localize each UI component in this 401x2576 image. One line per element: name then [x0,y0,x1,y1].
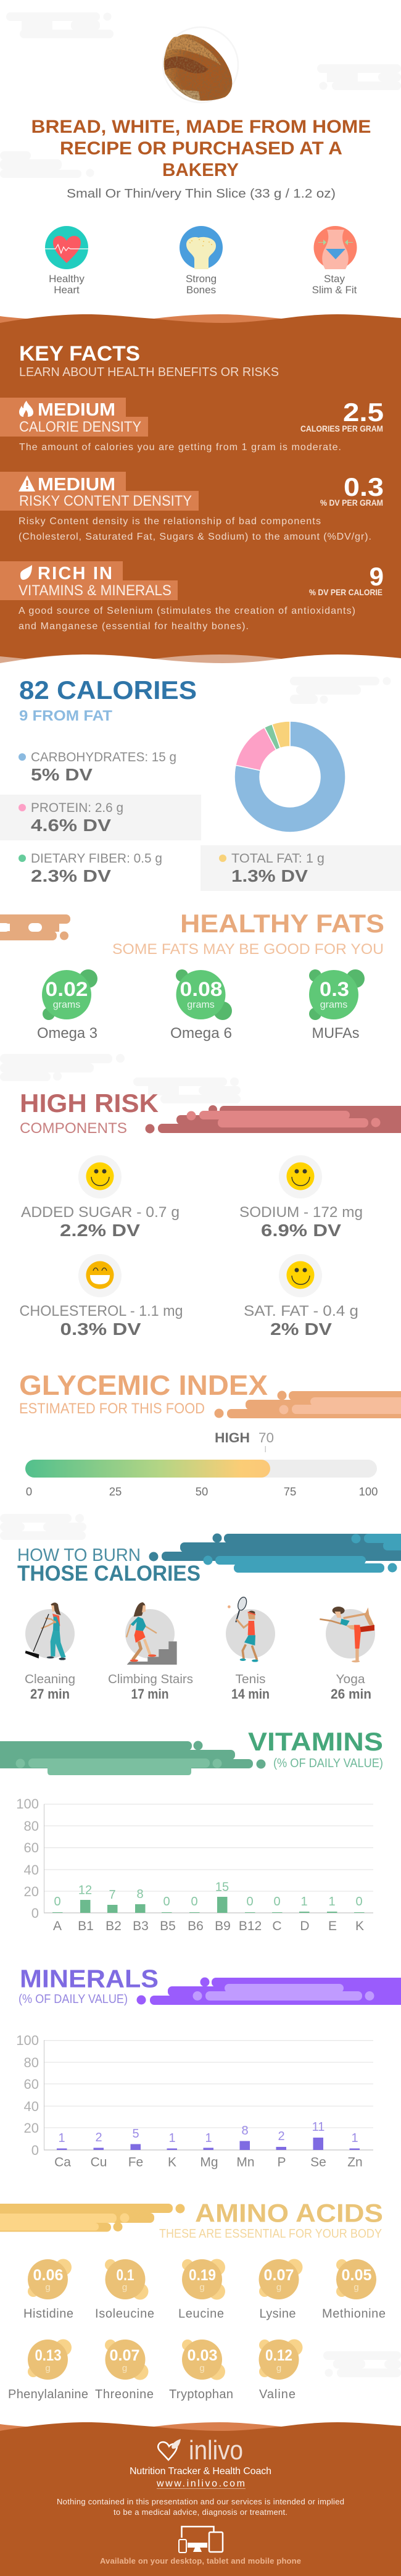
amino acid: methionine: Methionine [322,2307,386,2320]
nutrient: protein: PROTEIN: 2.6 g [31,801,123,815]
amino acid: phenylalanine [8,2339,88,2401]
chart: minerals bar chart: K [168,2155,176,2170]
heading: high risk: HIGH RISK [20,1089,159,1118]
stat: percent DV per calorie: 9 [370,562,384,591]
fat: omega 3: 0.02 [46,978,88,1000]
text: availability: Available on your desktop, tablet and mobile phone [100,2556,301,2566]
activity: yoga [320,1607,375,1702]
logo: inlivo [158,2435,243,2465]
badge: risky content density: RISKY CONTENT DENSITY [19,493,192,509]
text: calorie density description: The amount of calories you are getting from 1 gram is moderate. [19,442,341,453]
activity: cleaning [25,1602,75,1702]
label: yoga: 26 min [331,1686,371,1702]
activity: tennis [226,1596,275,1702]
fat: omega 6: grams [187,1000,215,1010]
subheading: vitamins percent of daily value: (% OF DAILY VALUE) [273,1757,383,1770]
chart: minerals bar chart: 1 [168,2131,176,2145]
heading: key facts: KEY FACTS [19,342,140,366]
chart: vitamins bar chart: 0 [31,1905,39,1921]
fat: omega 3 [37,969,97,1042]
heading: glycemic index: GLYCEMIC INDEX [19,1370,268,1401]
heading: healthy fats: HEALTHY FATS [180,909,384,938]
label: slim and fit: Stay [324,273,345,285]
badge: rich in vitamins and minerals [0,561,178,600]
chart: minerals bar chart: Mn [236,2155,255,2170]
chart: minerals bar chart: P [277,2155,286,2170]
amino acid: valine: g [276,2363,281,2373]
heading: calories: 82 CALORIES [19,675,197,705]
text: tagline: Nutrition Tracker & Health Coach [130,2466,271,2477]
amino acid: tryptophan: 0.03 [188,2347,217,2364]
amino acid: isoleucine: Isoleucine [95,2307,154,2320]
risk: sodium [239,1155,363,1240]
risk: saturated fat: SAT. FAT - 0.4 g [244,1303,358,1319]
fat: MUFAs [309,969,365,1042]
nutrient: total fat: 1.3% DV [231,866,308,885]
text: rich in description: and Manganese (essential for healthy bones). [19,621,249,632]
chart: vitamins bar chart: 100 [16,1796,39,1812]
chart: vitamins bar chart: 0 [246,1895,254,1909]
chart: minerals bar chart: 2 [278,2130,285,2143]
subheading: minerals percent of daily value: (% OF DAILY VALUE) [19,1993,128,2006]
chart: minerals bar chart: 1 [58,2131,65,2145]
amino acid: isoleucine: 0.1 [116,2267,134,2284]
decoration: high risk bars [146,1105,401,1134]
panel: key facts [0,314,401,663]
chart: vitamins bar chart: B5 [160,1919,176,1933]
heading: vitamins: VITAMINS [248,1727,383,1756]
amino acid: leucine: g [199,2282,205,2293]
amino acid: methionine: g [353,2282,359,2293]
label: yoga: Yoga [336,1673,365,1686]
decoration: vitamins bars [0,1741,265,1775]
chart: minerals bar chart: 1 [351,2131,358,2145]
amino acid: leucine [178,2259,225,2320]
chart: minerals bar chart: 8 [241,2124,249,2138]
amino acid: threonine [95,2340,154,2401]
amino acid: valine: 0.12 [265,2347,292,2364]
chart: minerals bar chart: 0 [31,2143,39,2158]
label: climbing stairs: Climbing Stairs [108,1673,193,1686]
fat: omega 6: Omega 6 [170,1025,232,1042]
activity: climbing stairs [108,1602,193,1702]
stat: percent DV per calorie: % DV PER CALORIE [309,587,382,597]
chart: minerals bar chart: Zn [347,2155,363,2170]
amino acid: isoleucine [95,2259,154,2320]
nutrient: protein: 4.6% DV [31,816,111,835]
chart: vitamins bar chart: 0 [355,1895,363,1909]
amino acid: leucine: 0.19 [189,2267,216,2284]
chart: minerals bar chart: Se [310,2155,326,2170]
decoration: minerals bars [137,1977,401,2005]
nutrient: dietary fiber: DIETARY FIBER: 0.5 g [31,851,162,866]
chart: minerals bar chart: 60 [24,2076,39,2092]
chart: glycemic index gauge: 0 [26,1485,32,1498]
decoration: healthy fats bars [0,914,70,940]
subheading: from fat: 9 FROM FAT [19,708,112,724]
chart: vitamins bar chart: 40 [24,1862,39,1878]
chart: minerals bar chart: Cu [91,2155,107,2170]
chart: glycemic index gauge: 25 [109,1485,122,1498]
label: tennis: 14 min [231,1686,270,1702]
chart: vitamins bar chart: 1 [300,1895,308,1909]
subheading: amino acids: THESE ARE ESSENTIAL FOR YOUR BODY [159,2227,382,2241]
panel: footer [0,2422,401,2576]
label: climbing stairs: 17 min [131,1686,169,1702]
decoration: burn calories bars [149,1534,401,1573]
chart: vitamins bar chart [16,1796,373,1933]
label: strong bones: Bones [186,284,216,296]
chart: vitamins bar chart: 12 [78,1883,92,1897]
title: RECIPE OR PURCHASED AT A [60,138,342,159]
risk: added sugar: ADDED SUGAR - 0.7 g [21,1204,180,1221]
stat: calories per gram [300,398,384,433]
risk: sodium: SODIUM - 172 mg [239,1204,363,1221]
chart: minerals bar chart: 20 [24,2120,39,2136]
nutrient: total fat [200,845,401,891]
chart: vitamins bar chart: A [53,1919,62,1933]
badge: rich in vitamins and minerals: RICH IN [38,564,112,583]
chart: vitamins bar chart: D [300,1919,310,1933]
nutrient: carbohydrates [19,750,176,784]
text: risky content description: Risky Content density is the relationship of bad components [19,516,321,527]
amino acid: histidine: Histidine [23,2307,73,2320]
chart: vitamins bar chart: B1 [78,1919,94,1933]
chart: vitamins bar chart: 80 [24,1818,39,1834]
nutrient: dietary fiber: 2.3% DV [31,866,111,885]
badge: calorie density: CALORIE DENSITY [19,419,141,435]
chart: vitamins bar chart: 20 [24,1884,39,1899]
fat: MUFAs: 0.3 [320,978,349,1000]
chart: minerals bar chart: 80 [24,2055,39,2070]
link: website: www.inlivo.com [156,2478,245,2489]
risk: cholesterol [20,1254,183,1339]
icon: healthy heart [45,226,88,269]
badge: calorie density: MEDIUM [38,400,115,420]
chart: vitamins bar chart: 60 [24,1840,39,1855]
risk: added sugar: 2.2% DV [60,1221,140,1240]
badge: calorie density [0,398,148,437]
fat: omega 6: 0.08 [180,978,222,1000]
chart: vitamins bar chart: 7 [109,1888,116,1902]
chart: vitamins bar chart: E [328,1919,337,1933]
chart: minerals bar chart: Fe [128,2155,143,2170]
stat: percent DV per gram: 0.3 [344,472,384,501]
risk: added sugar [21,1155,180,1240]
stat: percent DV per gram: % DV PER GRAM [320,498,383,508]
amino acid: lysine [259,2259,302,2320]
chart: glycemic index gauge [25,1430,378,1498]
risk: saturated fat [244,1254,358,1339]
label: tennis: Tenis [236,1673,265,1686]
badge: rich in vitamins and minerals: VITAMINS & MINERALS [19,582,172,599]
chart: minerals bar chart [16,2033,373,2170]
risk: sodium: 6.9% DV [261,1221,341,1240]
decoration: amino acids bars [0,2204,185,2231]
subtitle: serving size: Small Or Thin/very Thin Slice (33 g / 1.2 oz) [67,187,336,201]
amino acid: lysine: Lysine [259,2307,296,2320]
fat: MUFAs: grams [320,1000,347,1010]
title: BAKERY [162,160,239,180]
chart: minerals bar chart: 11 [312,2120,325,2134]
chart: vitamins bar chart: 1 [328,1895,336,1909]
fat: omega 3: Omega 3 [37,1025,97,1042]
label: cleaning: Cleaning [25,1673,75,1686]
chart: vitamins bar chart: 0 [163,1895,170,1909]
chart: vitamins bar chart: B2 [105,1919,122,1933]
chart: vitamins bar chart: 0 [191,1895,198,1909]
amino acid: isoleucine: g [122,2282,127,2293]
amino acid: phenylalanine: 0.13 [35,2347,62,2364]
label: strong bones: Strong [186,273,217,285]
fat: omega 3: grams [53,1000,80,1010]
chart: macronutrient donut [234,721,345,832]
title [31,117,371,180]
heading: minerals: MINERALS [20,1965,159,1993]
chart: vitamins bar chart: B12 [239,1919,262,1933]
subheading: estimated for this food: ESTIMATED FOR THIS FOOD [19,1400,205,1417]
chart: vitamins bar chart: C [272,1919,282,1933]
chart: glycemic index gauge: 70 [258,1430,274,1445]
amino acid: tryptophan [169,2340,233,2401]
chart: vitamins bar chart: 0 [54,1895,61,1909]
label: healthy heart: Healthy [49,273,85,285]
chart: minerals bar chart: Mg [200,2155,218,2170]
stat: percent DV per gram [320,472,384,508]
heading: how to burn: HOW TO BURN [17,1545,141,1565]
amino acid: methionine [322,2259,386,2320]
risk: saturated fat: 2% DV [270,1319,332,1339]
badge: risky content density [0,472,199,511]
stat: calories per gram: 2.5 [343,398,384,427]
amino acid: histidine [23,2259,73,2320]
fat: omega 6 [170,969,232,1042]
text: risky content description: (Cholesterol, Saturated Fat, Sugars & Sodium) to the amount (%DV/gr). [19,532,371,542]
chart: minerals bar chart: 2 [95,2131,102,2144]
label: cleaning: 27 min [30,1686,70,1702]
amino acid: threonine: g [122,2363,127,2373]
amino acid: lysine: 0.07 [264,2267,294,2284]
badge: risky content density: MEDIUM [38,475,115,495]
subheading: key facts: LEARN ABOUT HEALTH BENEFITS OR RISKS [19,366,279,379]
chart: minerals bar chart: Ca [54,2155,71,2170]
risk: cholesterol: CHOLESTEROL - 1.1 mg [20,1303,183,1319]
label: healthy heart: Heart [54,284,80,296]
stat: percent DV per calorie [309,562,384,597]
chart: vitamins bar chart: 15 [215,1881,229,1894]
fat: MUFAs: MUFAs [312,1025,359,1042]
chart: vitamins bar chart: B9 [215,1919,231,1933]
amino acid: methionine: 0.05 [342,2267,372,2284]
amino acid: threonine: 0.07 [110,2347,139,2364]
chart: vitamins bar chart: B3 [133,1919,149,1933]
amino acid: valine [259,2339,302,2401]
logo: inlivo: inlivo [189,2435,243,2465]
subheading: healthy fats: SOME FATS MAY BE GOOD FOR YOU [112,941,384,958]
icon: strong bones [180,226,223,269]
heading: amino acids: AMINO ACIDS [195,2198,383,2228]
chart: minerals bar chart: 1 [205,2131,212,2145]
chart: vitamins bar chart: B6 [188,1919,204,1933]
amino acid: tryptophan: Tryptophan [169,2388,233,2401]
nutrient: dietary fiber [19,851,162,885]
chart: minerals bar chart: 40 [24,2099,39,2114]
chart: vitamins bar chart: K [355,1919,364,1933]
amino acid: leucine: Leucine [178,2307,224,2320]
title: BREAD, WHITE, MADE FROM HOME [31,117,371,137]
nutrient: total fat: TOTAL FAT: 1 g [231,851,325,866]
chart: glycemic index gauge: 100 [359,1485,378,1498]
amino acid: lysine: g [276,2282,281,2293]
subheading: components: COMPONENTS [20,1120,127,1137]
chart: vitamins bar chart: 8 [136,1888,144,1901]
label: slim and fit: Slim & Fit [312,284,357,296]
icon: devices [179,2527,223,2553]
nutrient: carbohydrates: 5% DV [31,765,93,784]
amino acid: phenylalanine: g [45,2363,51,2373]
amino acid: histidine: 0.06 [33,2267,63,2284]
chart: glycemic index gauge: 50 [196,1485,208,1498]
decoration: glycemic index bars [215,1390,401,1418]
nutrient: protein [0,795,201,840]
icon: bread loaf [160,27,238,102]
chart: glycemic index gauge: HIGH [215,1430,250,1445]
chart: glycemic index gauge: 75 [284,1485,296,1498]
chart: minerals bar chart: 5 [132,2127,139,2141]
stat: calories per gram: CALORIES PER GRAM [300,424,383,433]
amino acid: histidine: g [45,2282,51,2293]
text: disclaimer: Nothing contained in this presentation and our services is intended or implied [57,2497,344,2506]
icon: slim and fit [313,226,357,269]
chart: vitamins bar chart: 0 [273,1895,281,1909]
nutrient: carbohydrates: CARBOHYDRATES: 15 g [31,750,176,764]
text: disclaimer: to be a medical advice, diagnosis or treatment. [114,2507,287,2517]
amino acid: tryptophan: g [199,2363,205,2373]
heading: those calories: THOSE CALORIES [17,1562,200,1586]
amino acid: threonine: Threonine [95,2388,154,2401]
amino acid: valine: Valine [259,2388,296,2401]
chart: minerals bar chart: 100 [16,2033,39,2048]
risk: cholesterol: 0.3% DV [60,1319,141,1339]
text: rich in description: A good source of Selenium (stimulates the creation of antioxidants) [19,606,355,616]
amino acid: phenylalanine: Phenylalanine [8,2388,88,2401]
